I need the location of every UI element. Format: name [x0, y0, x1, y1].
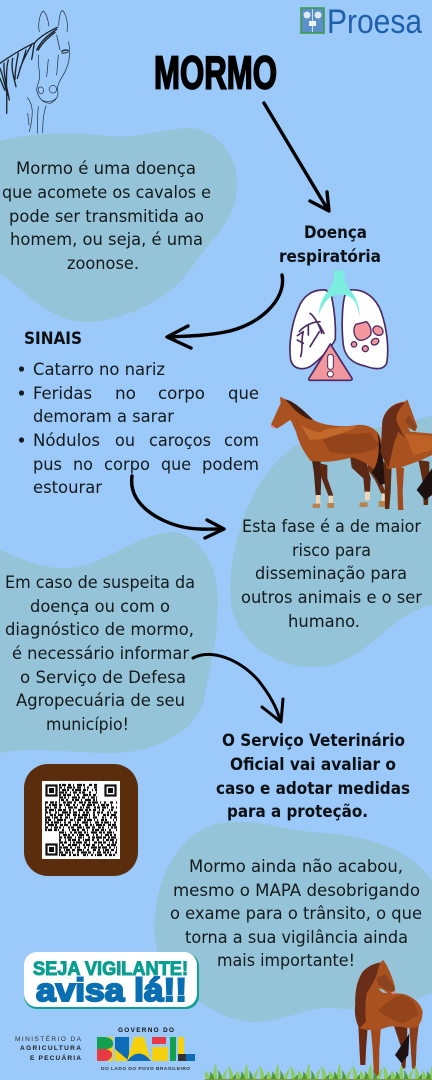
heading: respiratory disease: respiratória [279, 247, 381, 267]
icon: line drawing horse head [0, 10, 70, 133]
text: vigilance [170, 857, 422, 971]
arrow: title to respiratory disease [264, 103, 329, 211]
bullet: mucus: Catarro no nariz [33, 360, 165, 380]
text: veterinary service: para a proteção. [227, 802, 368, 822]
text: veterinary service: Oficial vai avaliar o [230, 755, 396, 775]
logo: Proesa [301, 3, 422, 41]
badge: seja vigilante: avisa lá!! [36, 972, 187, 1008]
title: MORMO [154, 46, 277, 98]
blob: intro background [0, 128, 237, 322]
text: in case of suspicion: doença ou com o [30, 597, 170, 617]
grass foreground [345, 1066, 432, 1080]
text: vigilance: mesmo o MAPA desobrigando [173, 881, 420, 901]
text: vigilance: torna a sua vigilância ainda [185, 928, 408, 948]
trachea [319, 271, 360, 317]
text: in case of suspicion: município! [46, 715, 129, 735]
Proesa wordmark: Proesa [327, 3, 422, 41]
text: risk phase: outros animais e o ser [241, 588, 422, 608]
text: intro: Mormo é uma doença [16, 159, 196, 179]
heading: signs: SINAIS [24, 329, 82, 349]
icon: two brown horses [271, 397, 432, 510]
ministry text [15, 1034, 82, 1062]
bullet: nodules: que [161, 455, 191, 475]
text: veterinary service: caso e adotar medidas [216, 779, 410, 799]
bullet: wounds [19, 384, 259, 427]
text: risk phase: humano. [288, 612, 360, 632]
bullet: nodules: podem [202, 455, 259, 475]
blob: vigilance background [154, 822, 432, 1022]
blob: risk background [230, 415, 432, 667]
horse left [271, 397, 386, 508]
badge: seja vigilante [24, 952, 199, 1009]
bullet: wounds: corpo [158, 384, 205, 404]
icon: brown horse bottom right [355, 960, 423, 1076]
text: in case of suspicion [5, 573, 195, 735]
text: in case of suspicion: diagnóstico de mormo, [5, 620, 194, 640]
badge: seja vigilante: SEJA VIGILANTE! [33, 959, 188, 980]
left lung [290, 290, 335, 369]
bullet: nodules: pus [33, 455, 62, 475]
bullet: nodules: com [224, 431, 259, 451]
bullet: wounds: no [115, 384, 136, 404]
text: intro: zoonose. [67, 254, 139, 274]
right lung [342, 290, 388, 369]
icon: lungs with warning [290, 271, 388, 380]
ministry text: E PECUÁRIA [30, 1053, 81, 1062]
QR code [24, 764, 138, 876]
text: intro: pode ser transmitida ao [9, 207, 204, 227]
ministry text: MINISTÉRIO DA [15, 1034, 82, 1043]
text: intro [2, 159, 211, 274]
text: in case of suspicion: Agropecuária de seu [16, 691, 185, 711]
text: veterinary service [216, 731, 410, 822]
text: vigilance: o exame para o trânsito, o que [170, 904, 422, 924]
text: risk phase: disseminação para [255, 564, 407, 584]
spots [351, 322, 385, 352]
bullet: nodules: estourar [33, 478, 102, 498]
text: risk phase [241, 517, 422, 632]
ministry text: AGRICULTURA [20, 1045, 81, 1052]
wordmark BRASIL [97, 1037, 195, 1061]
heading: respiratory disease [279, 223, 381, 267]
text: vigilance: mais importante! [217, 951, 355, 971]
bullet: wounds: Feridas [33, 384, 92, 404]
warning triangle [309, 344, 352, 380]
bullet: wounds: demoram a sarar [33, 407, 174, 427]
bullet: nodules: ou [115, 431, 135, 451]
text: veterinary service: O Serviço Veterinário [222, 731, 405, 751]
text: intro: homem, ou seja, é uma [10, 230, 203, 250]
text: in case of suspicion: Em caso de suspeita da [5, 573, 195, 593]
text: in case of suspicion: é necessário informar [12, 644, 189, 664]
bullet: wounds: que [228, 384, 259, 404]
text: risk phase: risco para [292, 541, 371, 561]
list: signs [19, 360, 259, 498]
heading: respiratory disease: Doença [304, 223, 367, 243]
horse right [381, 399, 432, 510]
logo: governo do Brasil: DO LADO DO POVO BRASILEIRO [101, 1066, 190, 1072]
arrow: respiratory disease to signs [167, 275, 283, 348]
grass [205, 1060, 432, 1080]
icon: Proesa book [301, 8, 324, 33]
bullet: nodules: Nódulos [33, 431, 100, 451]
bullet: nodules: caroços [149, 431, 211, 451]
text: vigilance: Mormo ainda não acabou, [189, 857, 403, 877]
bullet: nodules: corpo [104, 455, 150, 475]
logo: governo do Brasil: GOVERNO DO [118, 1027, 174, 1034]
text: risk phase: Esta fase é a de maior [242, 517, 421, 537]
bullet: nodules: no [73, 455, 93, 475]
logo: governo do Brasil [97, 1027, 195, 1072]
blob: suspicion background [0, 532, 218, 753]
text: intro: que acomete os cavalos e [2, 183, 211, 203]
bullet: nodules [19, 431, 259, 498]
text: in case of suspicion: o Serviço de Defesa [20, 668, 186, 688]
arrow: suspicion to veterinary service [193, 654, 283, 722]
arrow: signs to risk phase [132, 476, 224, 538]
